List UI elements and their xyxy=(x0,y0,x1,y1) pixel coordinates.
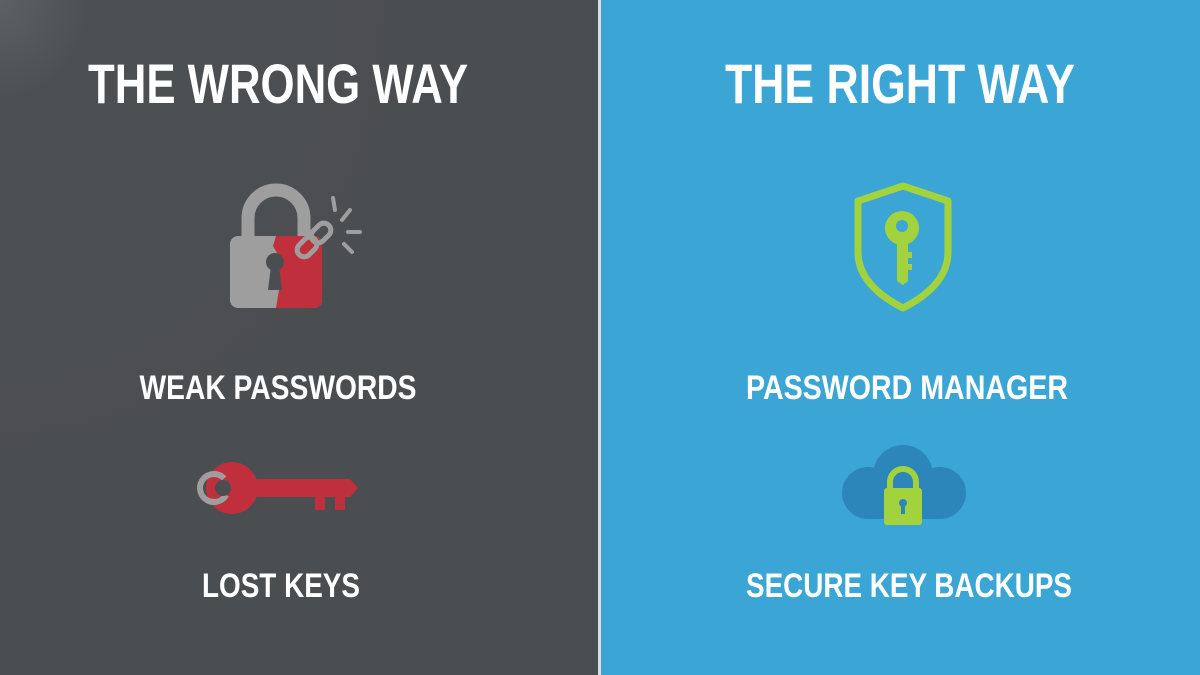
icon: shield key xyxy=(858,186,948,308)
icon: broken padlock xyxy=(230,190,360,308)
icon: cloud lock xyxy=(842,445,966,525)
title: the wrong way: THE WRONG WAY xyxy=(88,52,468,115)
label: weak passwords: WEAK PASSWORDS xyxy=(140,369,416,407)
panel: wrong way xyxy=(0,0,598,675)
panel: right way xyxy=(601,0,1200,675)
label: lost keys: LOST KEYS xyxy=(202,567,360,605)
icon: chain link xyxy=(294,220,334,260)
title: the right way: THE RIGHT WAY xyxy=(725,52,1075,115)
label: secure key backups: SECURE KEY BACKUPS xyxy=(746,567,1072,605)
icon: lost key xyxy=(195,462,358,514)
label: password manager: PASSWORD MANAGER xyxy=(746,369,1068,407)
